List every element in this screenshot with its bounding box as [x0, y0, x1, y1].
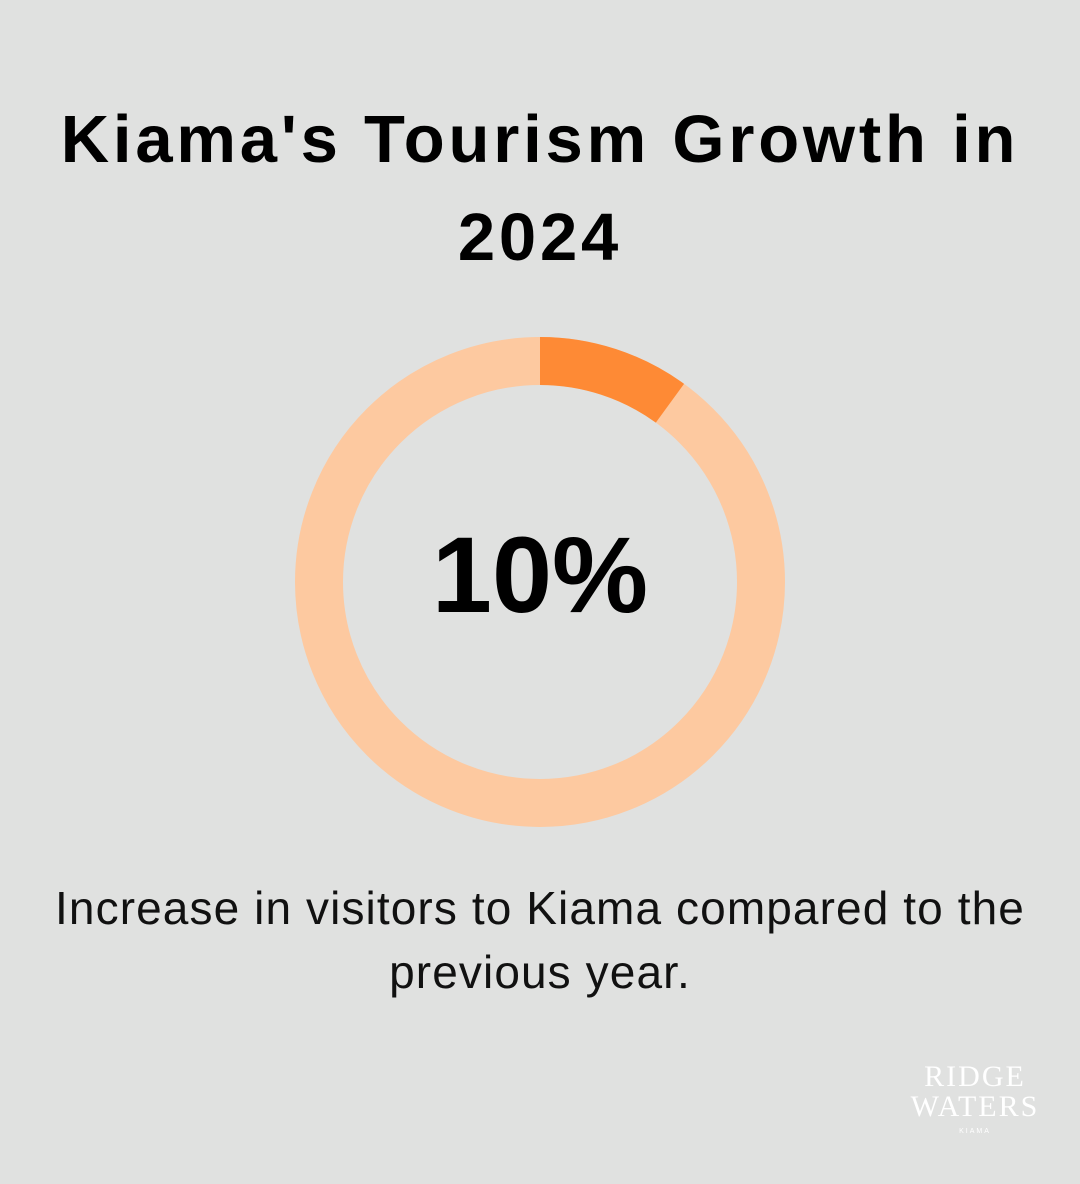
- title: [61, 102, 1019, 275]
- description: [55, 882, 1025, 998]
- title: 2024: [458, 200, 622, 275]
- big number: 10%: [432, 514, 648, 635]
- logo: RIDGE: [924, 1060, 1026, 1093]
- logo: [910, 1060, 1039, 1135]
- title: Kiama's Tourism Growth in: [61, 102, 1019, 177]
- description: Increase in visitors to Kiama compared to the: [55, 882, 1025, 934]
- logo: KIAMA: [959, 1128, 991, 1135]
- logo: WATERS: [911, 1090, 1039, 1123]
- description: previous year.: [389, 946, 691, 998]
